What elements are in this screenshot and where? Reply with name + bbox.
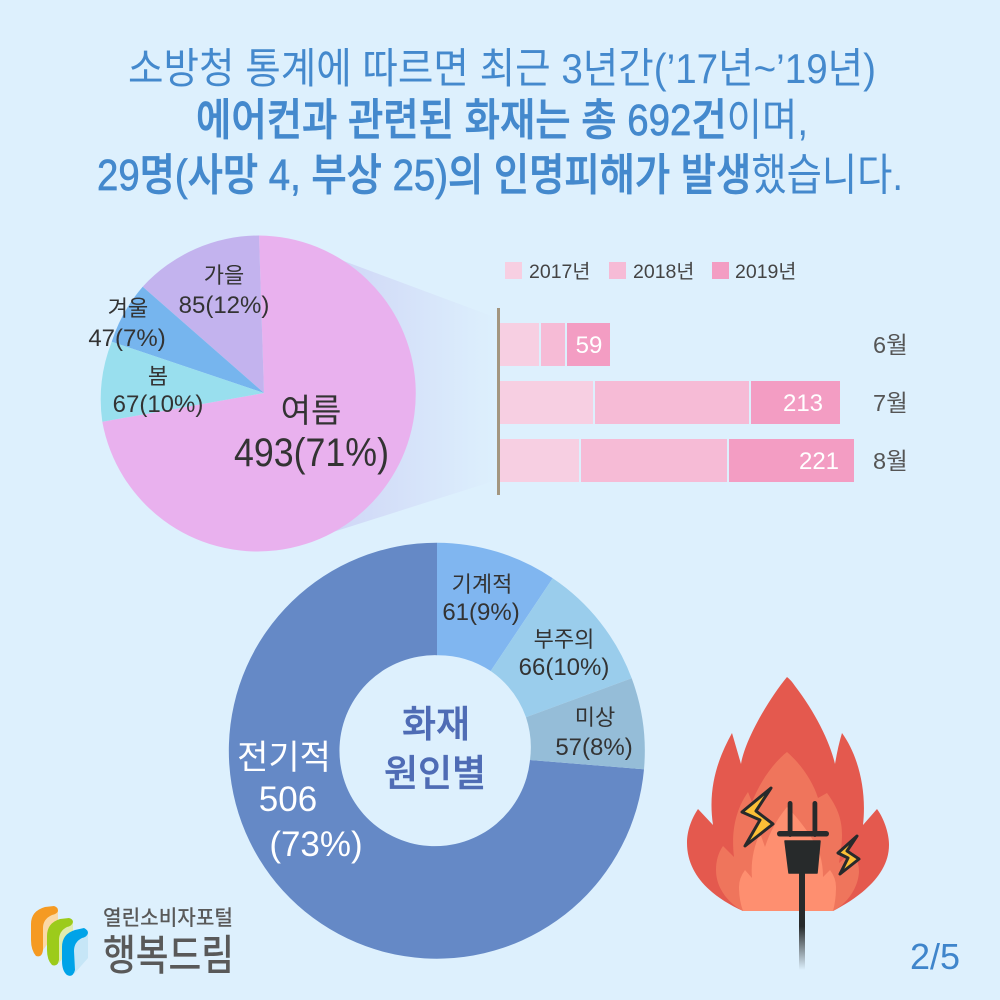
month labels: 6월 <box>873 332 908 358</box>
July bars <box>500 381 840 424</box>
pie labels <box>88 263 389 475</box>
donut labels: 미상 <box>575 705 615 730</box>
slice: unknown <box>526 678 645 769</box>
August bars <box>500 439 854 482</box>
zoom connector <box>330 257 497 533</box>
month labels: 7월 <box>873 390 908 416</box>
bar chart <box>497 308 908 495</box>
bar legend: 2019년 <box>735 261 796 283</box>
pie labels: 493(71%) <box>234 431 389 475</box>
title: 에어컨과 관련된 화재는 총 692건이며, <box>196 96 808 145</box>
July bars: 213 <box>783 390 823 417</box>
slice: summer <box>102 236 416 551</box>
slice: winter <box>112 287 264 393</box>
donut labels: 66(10%) <box>519 654 609 681</box>
donut labels: 기계적 <box>452 572 512 597</box>
donut center title: 원인별 <box>384 753 486 794</box>
donut labels: 61(9%) <box>442 599 520 626</box>
slice: mechanical <box>437 543 553 671</box>
pie labels: 가을 <box>204 263 244 288</box>
bar legend <box>505 261 796 283</box>
logo <box>31 906 234 979</box>
pie labels: 봄 <box>148 364 168 389</box>
icon: burning plug <box>687 677 889 970</box>
logo: 행복드림 <box>103 932 234 979</box>
title: 소방청 통계에 따르면 최근 3년간(’17년~’19년) <box>128 45 876 92</box>
month labels: 8월 <box>873 448 908 474</box>
page number: 2/5 <box>910 936 960 977</box>
donut labels: 57(8%) <box>555 734 633 761</box>
pie labels: 여름 <box>281 392 341 429</box>
slice: spring <box>101 342 264 422</box>
donut labels: (73%) <box>269 825 363 864</box>
donut labels: 전기적 <box>237 739 331 777</box>
June bars <box>500 323 610 366</box>
pie chart: season <box>101 236 416 551</box>
pie labels: 47(7%) <box>88 325 166 352</box>
donut labels: 506 <box>259 780 317 819</box>
bar legend: 2017년 <box>529 261 590 283</box>
logo mark <box>31 906 88 976</box>
donut center title <box>384 704 486 794</box>
August bars: 221 <box>799 448 839 475</box>
flame inner <box>739 807 836 911</box>
plug <box>777 801 829 970</box>
pie labels: 67(10%) <box>113 391 203 418</box>
title: 29명(사망 4, 부상 25)의 인명피해가 발생했습니다. <box>97 151 903 200</box>
flame middle <box>716 752 859 911</box>
month labels <box>873 332 908 474</box>
bolt small <box>838 836 859 874</box>
bolt large <box>742 788 773 846</box>
flame outer <box>687 677 889 911</box>
slice: carelessness <box>491 578 632 717</box>
donut labels <box>237 572 633 864</box>
slice: autumn <box>143 236 264 393</box>
donut chart: cause <box>229 543 645 959</box>
slice: electrical <box>229 543 644 959</box>
June bars: 59 <box>576 332 602 359</box>
title <box>97 45 903 200</box>
bar legend: 2018년 <box>633 261 694 283</box>
axis <box>497 308 500 495</box>
pie labels: 겨울 <box>108 296 148 321</box>
donut center title: 화재 <box>402 704 470 745</box>
pie labels: 85(12%) <box>179 292 269 319</box>
donut labels: 부주의 <box>534 627 594 652</box>
logo text: 열린소비자포털 <box>103 907 233 930</box>
